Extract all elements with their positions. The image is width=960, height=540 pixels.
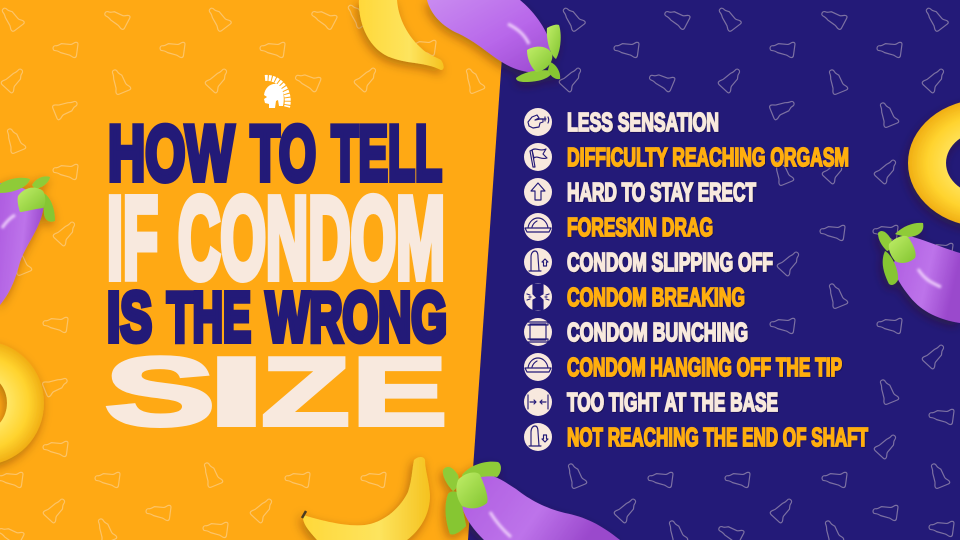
title line: how to tell: TO [250,109,316,197]
title line: size: I [208,337,266,446]
item: too tight at the base [524,387,778,417]
icon: flag [524,143,552,171]
title line: is the wrong: THE [167,278,251,356]
item: less sensation: LESS SENSATION [567,107,719,137]
icon: cloche [524,213,552,241]
icon: right banana ring [908,99,960,227]
icon: bottom banana [302,457,430,540]
panel: navy right background [468,0,960,540]
item: foreskin drag [524,212,713,242]
item: hard to stay erect: HARD TO STAY ERECT [567,177,756,207]
icon: breaking bar [524,283,552,311]
item: hard to stay erect [524,177,756,207]
icon: condom with down arrow [524,423,552,451]
title line: how to tell: TELL [332,109,442,197]
icon: tight arrows [524,388,552,416]
icon: up arrow [524,178,552,206]
icon: cloche [524,353,552,381]
title line: if condom: CONDOM [178,173,445,303]
icon: top banana [359,0,444,70]
item: foreskin drag: FORESKIN DRAG [567,212,713,242]
title line: how to tell: HOW [108,109,234,197]
icon: trojan helmet logo [264,78,288,108]
icon: top eggplant [427,0,561,82]
item: less sensation [524,107,719,137]
item: too tight at the base: TOO TIGHT AT THE BASE [567,387,778,417]
icon: right eggplant [878,223,960,323]
icon: left banana ring [0,341,44,465]
pattern: condom outlines on navy [558,4,954,540]
item: condom bunching: CONDOM BUNCHING [567,317,748,347]
title [105,109,447,446]
item: condom bunching [524,317,748,347]
title line: is the wrong: WRONG [266,278,447,356]
icon: hand [524,108,552,136]
item: not reaching the end of shaft [524,422,868,452]
item: condom slipping off [524,247,773,277]
item: condom breaking [524,282,745,312]
title line: is the wrong: IS [107,278,152,356]
icon: condom with up arrow [524,248,552,276]
icon: scroll [524,318,552,346]
list of signs [524,107,868,452]
icon: left eggplant [0,176,55,305]
title line: if condom: IF [107,173,158,303]
item: condom breaking: CONDOM BREAKING [567,282,745,312]
title line: size: Z [262,337,350,446]
item: condom slipping off: CONDOM SLIPPING OFF [567,247,773,277]
title line: size: E [352,337,447,446]
item: condom hanging off the tip [524,352,842,382]
icon: bottom eggplant [443,462,620,540]
pattern: condom outlines on orange [0,1,485,540]
title line: size: S [105,337,215,446]
item: difficulty reaching orgasm [524,142,849,172]
